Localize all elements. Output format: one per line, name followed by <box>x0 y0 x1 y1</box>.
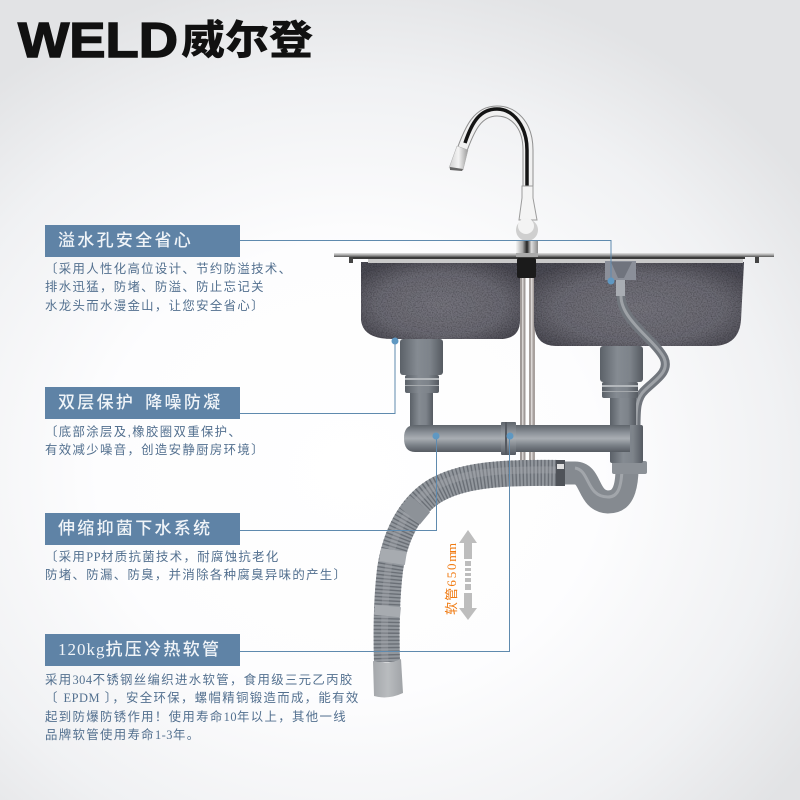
text: drain system: 〔采用PP材质抗菌技术，耐腐蚀抗老化 <box>45 550 280 564</box>
text: hose: 起到防爆防锈作用！使用寿命10年以上，其他一线 <box>45 710 347 724</box>
text: overflow hole: 水龙头而水漫金山，让您安全省心〕 <box>45 299 265 313</box>
text: hose: 采用304不锈钢丝编织进水软管，食用级三元乙丙胶 <box>45 673 354 687</box>
faucet black mounting nut <box>517 258 536 278</box>
heading: overflow hole <box>45 225 240 257</box>
connector: drain system <box>240 432 440 530</box>
horizontal branch pipe <box>404 422 643 463</box>
text: drain system <box>45 550 347 582</box>
heading: double-layer protection <box>45 387 240 419</box>
text: double-layer protection <box>45 425 265 457</box>
text: overflow hole: 排水迅猛，防堵、防溢、防止忘记关 <box>45 280 265 294</box>
connector: overflow hole <box>240 240 614 284</box>
corrugated drain hose <box>385 470 560 662</box>
sink: stainless top plate <box>334 253 774 263</box>
heading: double-layer protection: 双层保护 降噪防凝 <box>58 393 222 412</box>
connector: hose <box>240 432 514 652</box>
sink: rim shadow strip <box>368 259 743 263</box>
text: double-layer protection: 有效减少噪音，创造安静厨房环境〕 <box>45 443 265 457</box>
right drain <box>600 346 643 428</box>
connector: double-layer protection <box>240 338 398 414</box>
faucet <box>449 109 538 254</box>
logo: WELD 威尔登: WELD <box>18 14 178 68</box>
text: overflow hole <box>45 262 292 313</box>
P-trap <box>556 460 647 502</box>
logo: WELD 威尔登 <box>17 8 314 68</box>
faucet supply tubes <box>520 276 535 462</box>
heading: hose <box>45 634 240 666</box>
sink: left basin <box>361 262 520 339</box>
text: overflow hole: 〔采用人性化高位设计、节约防溢技术、 <box>45 262 292 276</box>
text: hose <box>45 673 360 742</box>
text: hose: 品牌软管使用寿命1-3年。 <box>45 728 200 742</box>
text: hose: 〔 EPDM 〕，安全环保，螺帽精铜锻造而成，能有效 <box>45 691 360 705</box>
heading: drain system: 伸缩抑菌下水系统 <box>58 519 212 538</box>
sink: right basin <box>534 262 744 346</box>
length arrow <box>459 530 477 620</box>
logo: WELD 威尔登: 威尔登 <box>181 8 314 66</box>
overflow trough <box>605 261 636 296</box>
text: drain system: 防堵、防漏、防臭，并消除各种腐臭异味的产生〕 <box>45 568 347 582</box>
overflow hose <box>621 296 665 428</box>
text: double-layer protection: 〔底部涂层及,橡胶圈双重保护、 <box>45 425 242 439</box>
hose length label: 软管650mm <box>444 544 459 615</box>
heading: hose: 120kg抗压冷热软管 <box>58 640 221 659</box>
heading: overflow hole: 溢水孔安全省心 <box>58 231 193 250</box>
left drain <box>400 339 443 428</box>
heading: drain system <box>45 513 240 545</box>
hose end cuff <box>373 659 403 697</box>
